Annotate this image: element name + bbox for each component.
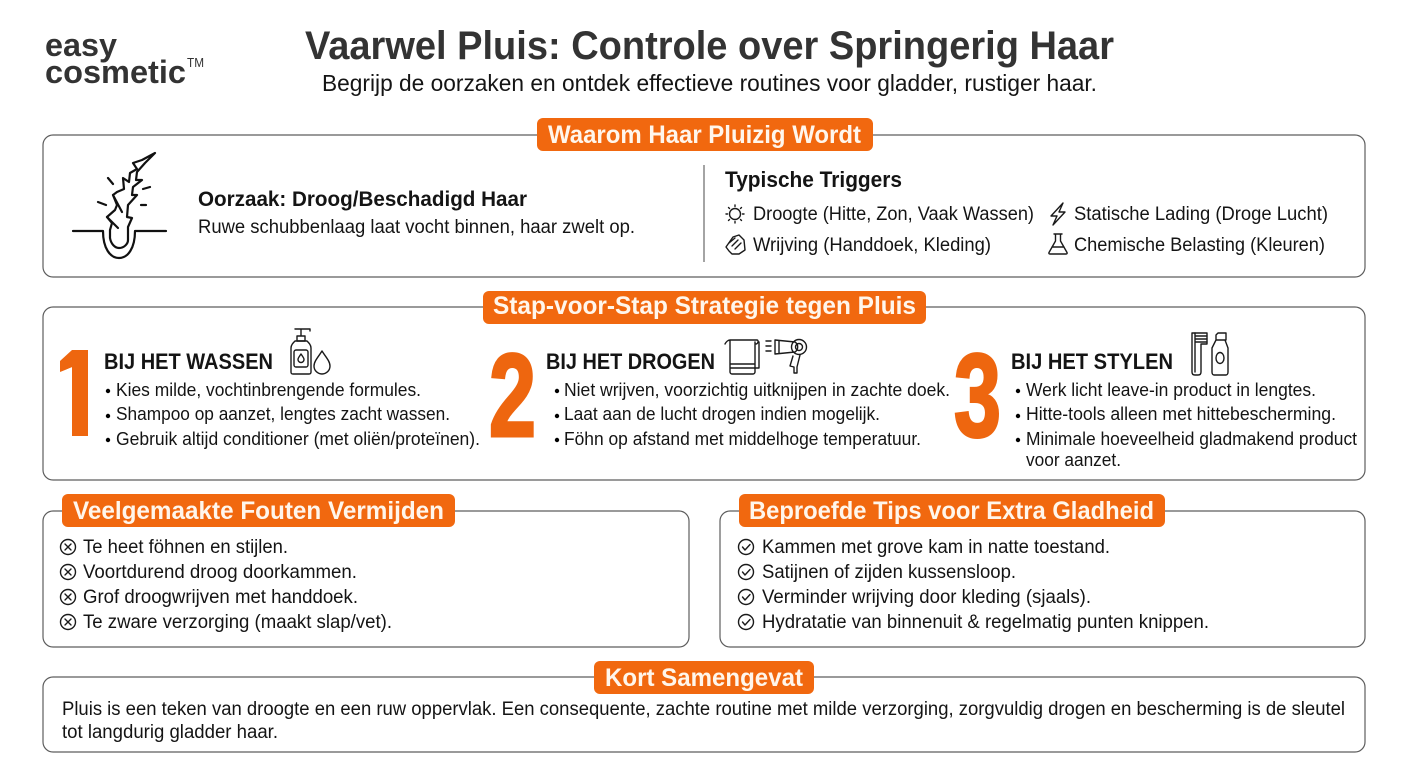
subtitle: Begrijp de oorzaken en ontdek effectieve routines voor gladder, rustiger haar.	[322, 70, 1097, 96]
text: typical triggers: Statische Lading (Droge Lucht)	[1074, 204, 1328, 225]
icon: cross	[60, 540, 76, 554]
icon: comb and product bottle	[1192, 333, 1228, 375]
icon: frizzy hair strand in follicle	[73, 153, 166, 258]
heading: mistakes: Veelgemaakte Fouten Vermijden	[73, 497, 444, 525]
list: washing: Gebruik altijd conditioner (met oliën/proteïnen).	[116, 428, 480, 449]
panel: causes	[43, 118, 1365, 277]
text: typical triggers: Droogte (Hitte, Zon, Vaak Wassen)	[753, 204, 1034, 225]
logo	[45, 27, 204, 90]
icon: cross	[60, 564, 76, 580]
icon: pump bottle and drop	[291, 329, 330, 374]
list: styling: Werk licht leave-in product in lengtes.	[1026, 379, 1316, 400]
logo: cosmetic	[45, 54, 186, 90]
list: styling: Minimale hoeveelheid gladmakend product	[1026, 428, 1357, 449]
list: tips: Kammen met grove kam in natte toestand.	[762, 537, 1110, 558]
text: typical triggers: Chemische Belasting (Kleuren)	[1074, 235, 1325, 256]
list: styling: voor aanzet.	[1026, 449, 1121, 470]
icon: lightning	[1051, 203, 1065, 225]
list: drying: Föhn op afstand met middelhoge temperatuur.	[564, 428, 921, 449]
list: mistakes: Voortdurend droog doorkammen.	[83, 562, 357, 583]
text: summary: tot langdurig gladder haar.	[62, 722, 278, 743]
panel: common mistakes	[43, 494, 689, 647]
step 1: washing	[60, 328, 478, 449]
step 3: styling: BIJ HET STYLEN	[1011, 349, 1173, 374]
heading: causes: Waarom Haar Pluizig Wordt	[548, 121, 862, 149]
text: typical triggers: Wrijving (Handdoek, Kleding)	[753, 235, 991, 256]
number 3: 3	[954, 330, 1001, 462]
heading: tips: Beproefde Tips voor Extra Gladheid	[749, 497, 1154, 525]
list: washing: Shampoo op aanzet, lengtes zacht wassen.	[116, 403, 450, 424]
icon: check	[738, 614, 754, 630]
list: mistakes: Te zware verzorging (maakt slap/vet).	[83, 612, 392, 633]
step 2: drying	[489, 330, 950, 462]
step 1: washing: BIJ HET WASSEN	[104, 349, 273, 374]
panel: proven tips	[720, 494, 1365, 647]
heading: strategy: Stap-voor-Stap Strategie tegen Pluis	[493, 292, 916, 320]
icon: check	[738, 540, 754, 554]
text: typical triggers	[725, 167, 1328, 256]
list: mistakes: Te heet föhnen en stijlen.	[83, 537, 288, 558]
heading: summary: Kort Samengevat	[605, 664, 804, 692]
list: drying	[555, 379, 950, 449]
step 2: drying: BIJ HET DROGEN	[546, 349, 715, 374]
logo: TM	[187, 55, 204, 70]
list: mistakes: Grof droogwrijven met handdoek.	[83, 587, 358, 608]
number 1: 1	[56, 330, 100, 462]
step 3: styling	[954, 330, 1357, 470]
list: drying: Laat aan de lucht drogen indien mogelijk.	[564, 403, 880, 424]
list: tips	[738, 537, 1209, 633]
icon: rubbing hands	[726, 235, 745, 254]
icon: towel and hair dryer	[725, 340, 806, 374]
icon: check	[738, 564, 754, 580]
list: tips: Satijnen of zijden kussensloop.	[762, 562, 1016, 583]
icon: flask	[1049, 234, 1067, 254]
text: summary: Pluis is een teken van droogte en een ruw oppervlak. Een consequente, zachte routine met milde verzorging, zorgvuldig drogen en bescherming is de sleutel	[62, 699, 1345, 720]
list: drying: Niet wrijven, voorzichtig uitknijpen in zachte doek.	[564, 379, 950, 400]
list: mistakes	[60, 537, 392, 633]
list: styling: Hitte-tools alleen met hittebescherming.	[1026, 403, 1336, 424]
text: summary	[62, 699, 1345, 743]
icon: check	[738, 590, 754, 604]
icon: cross	[60, 614, 76, 630]
text: cause: Oorzaak: Droog/Beschadigd Haar	[198, 188, 527, 211]
list: styling	[1016, 379, 1357, 470]
title: Vaarwel Pluis: Controle over Springerig Haar	[305, 24, 1114, 68]
icon: sun	[726, 205, 744, 223]
panel: summary	[43, 661, 1365, 752]
list: tips: Hydratatie van binnenuit & regelmatig punten knippen.	[762, 612, 1209, 633]
logo: easy	[45, 27, 117, 63]
text: typical triggers: Typische Triggers	[725, 167, 902, 192]
panel: step-by-step strategy	[43, 291, 1365, 480]
list: washing: Kies milde, vochtinbrengende formules.	[116, 379, 421, 400]
icon: cross	[60, 590, 76, 604]
number 2: 2	[489, 330, 536, 462]
list: washing	[106, 379, 480, 449]
list: tips: Verminder wrijving door kleding (sjaals).	[762, 587, 1091, 608]
text: cause	[198, 188, 635, 238]
text: cause: Ruwe schubbenlaag laat vocht binnen, haar zwelt op.	[198, 217, 635, 238]
